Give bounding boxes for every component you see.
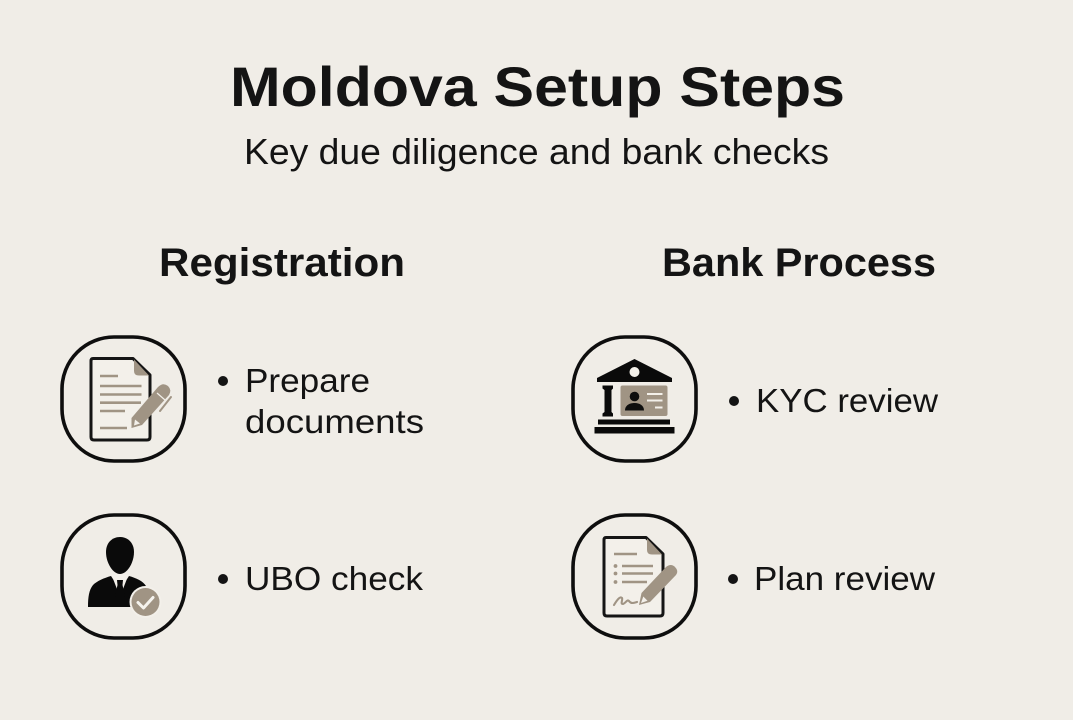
bullet text: Prepare documents: Prepare: [245, 362, 370, 399]
icon: person with check badge: [62, 515, 185, 638]
heading: Registration: Registration: [159, 241, 405, 285]
heading: Bank Process: Bank Process: [662, 241, 936, 285]
subtitle: Key due diligence and bank checks: [244, 131, 829, 172]
bullet text: UBO check: UBO check: [245, 560, 424, 597]
icon: bank with ID card: [573, 337, 696, 461]
icon: document with pencil: [62, 337, 185, 461]
bullet text: Plan review: Plan review: [754, 560, 935, 597]
bullet text: KYC review: KYC review: [756, 382, 938, 419]
title: Moldova Setup Steps: [230, 55, 845, 118]
bullet text: Prepare documents: documents: [245, 403, 424, 440]
icon: signed plan with pencil: [573, 515, 696, 638]
bullet text: Prepare documents: [218, 362, 424, 440]
